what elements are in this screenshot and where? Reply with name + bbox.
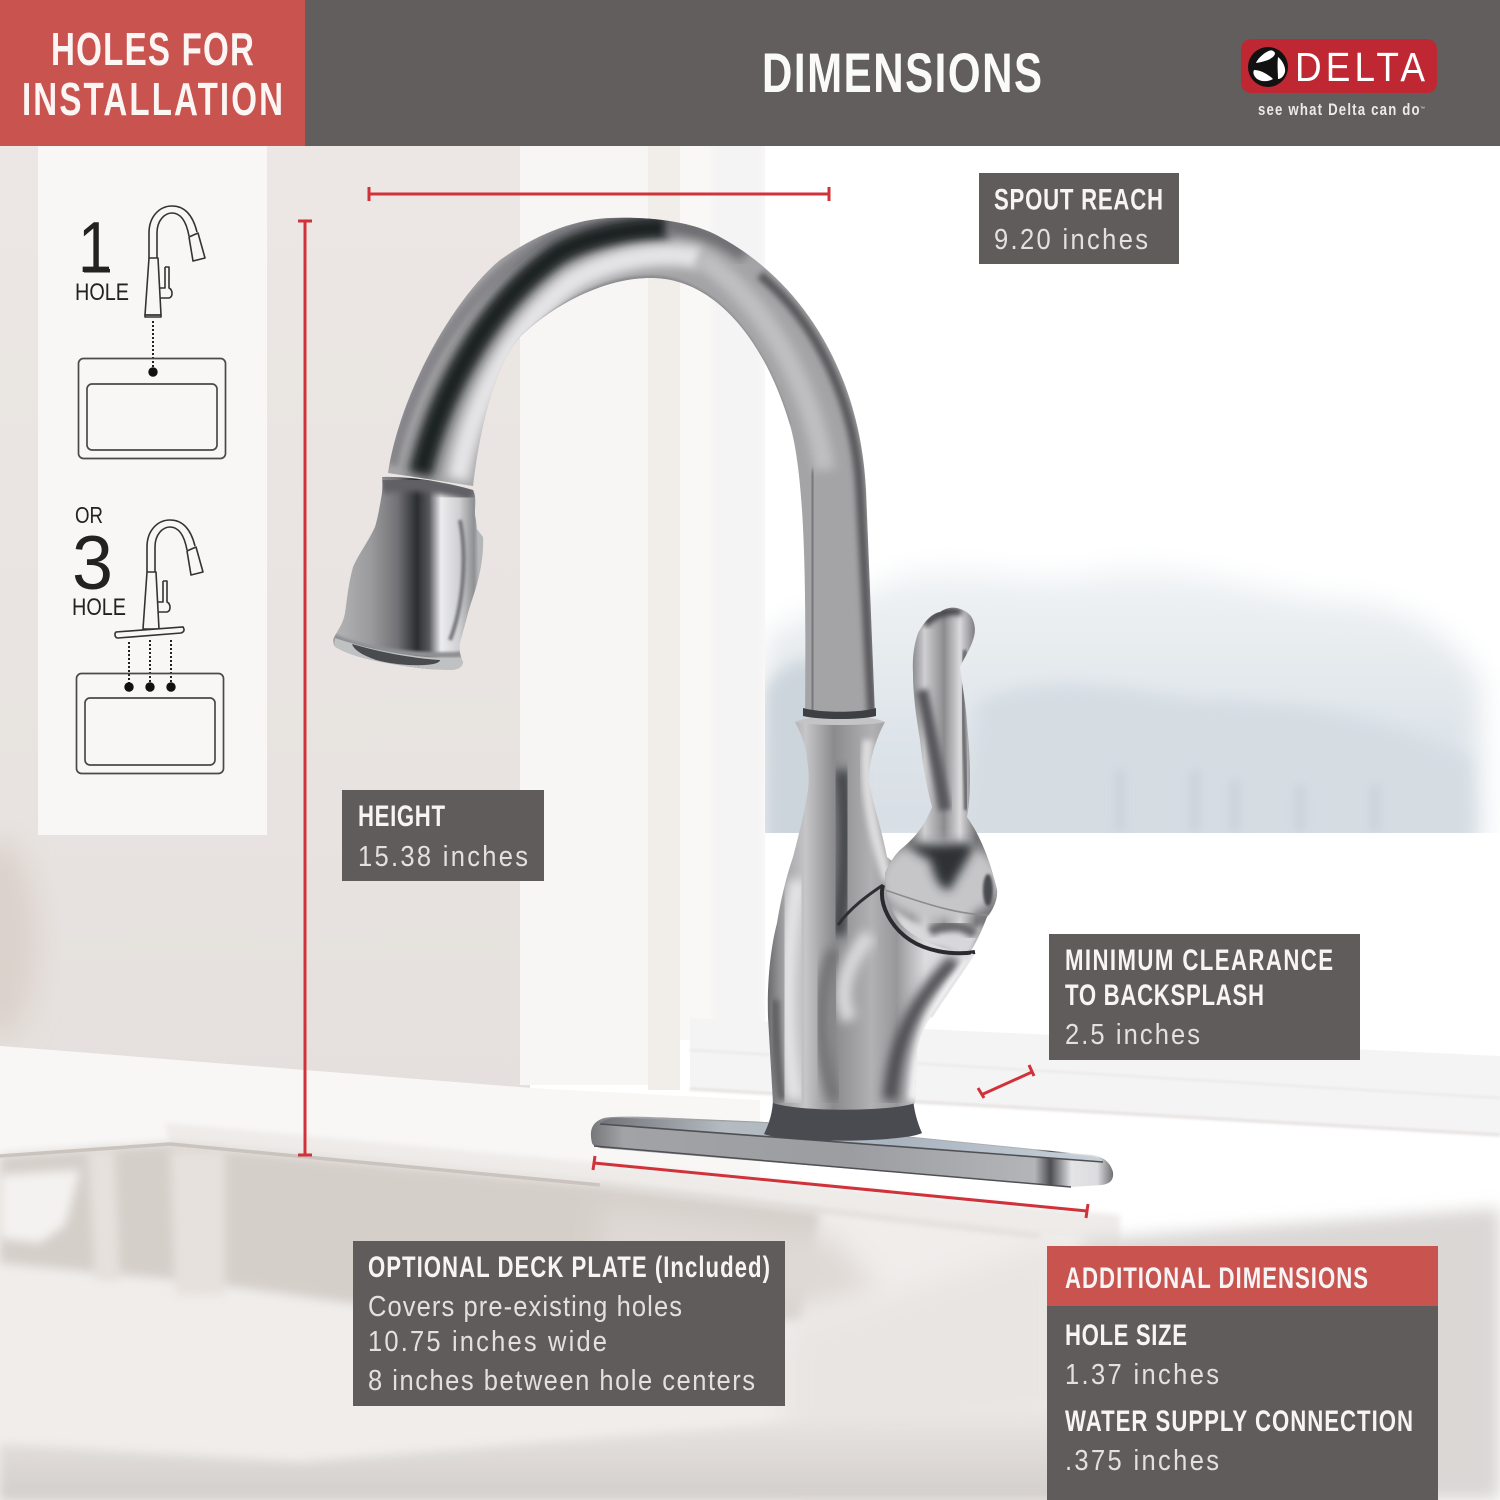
panel: additional dimensions: ADDITIONAL DIMENSIONS [1065, 1261, 1368, 1295]
callout: height: 15.38 inches [358, 839, 528, 872]
icon: three-hole option: 3 [72, 521, 113, 606]
dimension line: spout reach [369, 187, 829, 201]
callout: minimum clearance: 2.5 inches [1065, 1017, 1200, 1050]
panel: additional dimensions: HOLE SIZE [1065, 1318, 1187, 1352]
sill and backsplash ledge [690, 1018, 1500, 1135]
panel: additional dimensions: WATER SUPPLY CONNECTION [1065, 1404, 1413, 1438]
dimension line: height [298, 221, 312, 1155]
sink bowl [0, 1144, 1040, 1320]
panel: additional dimensions [1047, 1246, 1438, 1500]
wall [0, 140, 530, 1088]
callout: spout reach: 9.20 inches [994, 222, 1148, 255]
callout: minimum clearance [1049, 934, 1360, 1060]
dimension line: deck plate width [593, 1156, 1088, 1218]
callout: optional deck plate: Covers pre-existing holes [368, 1289, 682, 1322]
panel: additional dimensions: .375 inches [1065, 1443, 1219, 1476]
counter [0, 1144, 1100, 1500]
handle ring [882, 885, 975, 953]
left sill [0, 1046, 760, 1180]
callout: spout reach: SPOUT REACH [994, 182, 1163, 216]
callout: optional deck plate: OPTIONAL DECK PLATE (Included) [368, 1250, 770, 1284]
header bar [305, 0, 1500, 146]
counter front [785, 1240, 1060, 1500]
callout: optional deck plate [353, 1241, 785, 1406]
faucet body [768, 716, 971, 1110]
logo: Delta: DELTA [1295, 45, 1425, 90]
callout: optional deck plate: 8 inches between hole centers [368, 1363, 755, 1396]
faucet photo [333, 218, 1113, 1187]
red header: holes for installation: INSTALLATION [22, 75, 283, 125]
panel: additional dimensions: 1.37 inches [1065, 1357, 1219, 1390]
window frame [520, 140, 765, 1090]
pull-down spray head [333, 473, 483, 672]
icon: one-hole option [75, 206, 226, 458]
body collar [795, 716, 885, 725]
callout: height: HEIGHT [358, 799, 445, 833]
callout: minimum clearance: MINIMUM CLEARANCE [1065, 943, 1333, 977]
callout: optional deck plate: 10.75 inches wide [368, 1324, 607, 1357]
faucet base ring [764, 1098, 922, 1141]
spout [388, 218, 876, 719]
callout: height [342, 790, 544, 881]
icon: three-hole option [72, 502, 224, 774]
snowy trees through window [765, 569, 1480, 850]
logo: Delta [1241, 39, 1437, 119]
logo: Delta: see what Delta can do [1258, 101, 1420, 119]
icon: three-hole option: OR [75, 502, 103, 528]
dimension line: backsplash clearance [978, 1065, 1034, 1098]
lever handle [880, 608, 1000, 1017]
icon: three-hole option: HOLE [72, 594, 126, 621]
heading: dimensions: DIMENSIONS [762, 42, 1042, 104]
icon: one-hole option: 1 [78, 208, 112, 288]
callout: spout reach [979, 173, 1179, 264]
red header: holes for installation: HOLES FOR [51, 25, 254, 75]
icon: one-hole option: HOLE [75, 279, 129, 306]
panel: holes for installation diagrams [38, 146, 267, 835]
deck plate [591, 1117, 1113, 1187]
callout: minimum clearance: TO BACKSPLASH [1065, 978, 1264, 1012]
red dimension lines [298, 187, 1088, 1218]
spout collar [803, 708, 876, 719]
logo: Delta: ™ [1420, 106, 1425, 112]
red header: holes for installation [0, 0, 305, 146]
counter edge band [165, 1123, 1120, 1250]
